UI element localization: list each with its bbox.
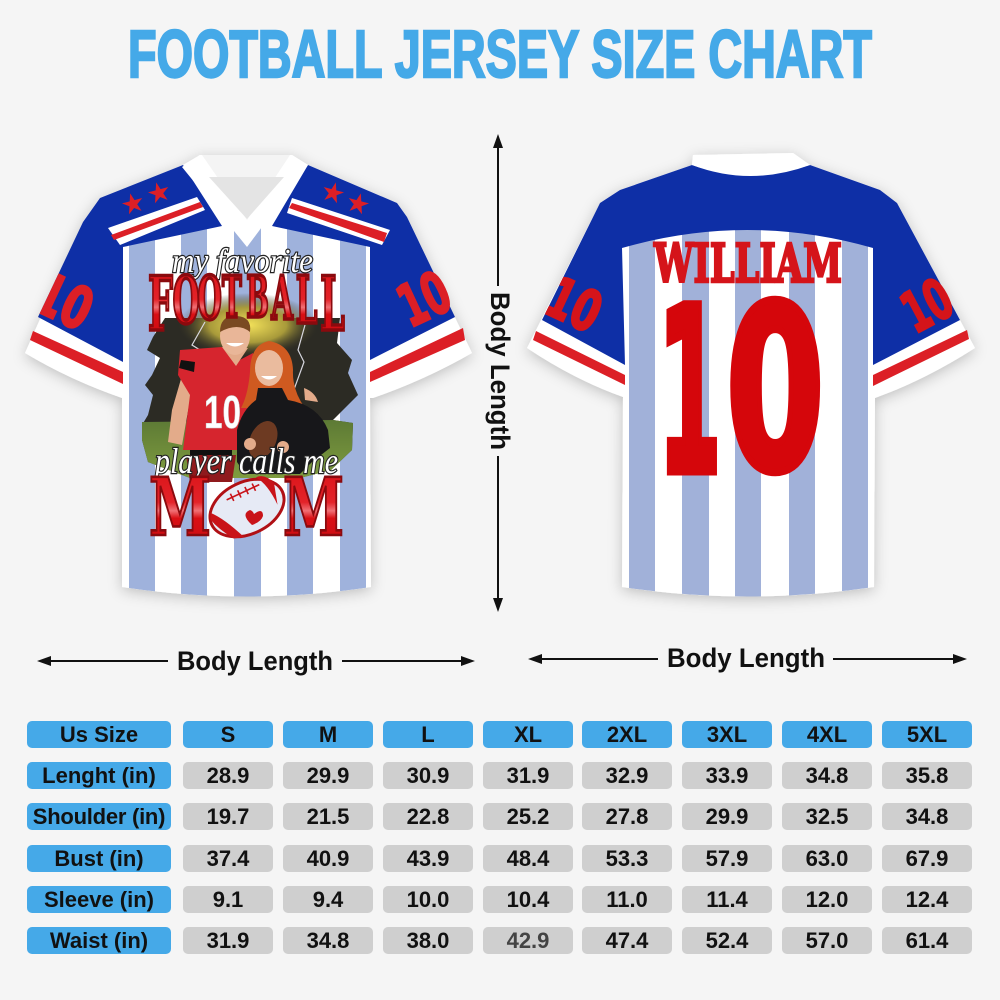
- row: sleeve: 9.1: [213, 887, 243, 912]
- arrow: back width: [528, 643, 967, 673]
- row: bust: 57.9: [706, 846, 748, 871]
- back collar: [692, 153, 810, 176]
- row: bust: 48.4: [507, 846, 549, 871]
- arrow: back width: Body Length: [667, 643, 825, 673]
- row: waist: 38.0: [407, 928, 449, 953]
- header row: us sizes: M: [319, 722, 337, 747]
- photo: woman in black sweater: [237, 341, 330, 474]
- sleeve stripes: [533, 330, 969, 386]
- row: length: [27, 762, 972, 789]
- row: shoulder: 22.8: [407, 804, 449, 829]
- header row: us sizes: Us Size: [60, 722, 138, 747]
- jersey silhouette: [25, 155, 472, 596]
- photo: man in red jersey: [168, 316, 254, 482]
- artwork text: FOOTBALL: T: [222, 263, 242, 331]
- row: waist: 31.9: [207, 928, 249, 953]
- artwork text: FOOTBALL: B: [246, 263, 269, 331]
- row: length: 28.9: [207, 763, 249, 788]
- row: bust: Bust (in): [54, 846, 144, 871]
- artwork text: MOM: M: [149, 460, 211, 554]
- row: shoulder: 29.9: [706, 804, 748, 829]
- number: 10: 1: [658, 260, 721, 525]
- photo: stadium background: [142, 293, 358, 478]
- left sleeve number: 10: [535, 265, 611, 347]
- body stripes: [629, 225, 868, 600]
- collar: [182, 155, 308, 247]
- row: waist: 57.0: [806, 928, 848, 953]
- row: length: 35.8: [906, 763, 948, 788]
- row: waist: 47.4: [606, 928, 648, 953]
- row: length: 31.9: [507, 763, 549, 788]
- row: sleeve: 11.0: [606, 887, 648, 912]
- header row: us sizes: 2XL: [607, 722, 647, 747]
- header row: us sizes: L: [421, 722, 435, 747]
- left sleeve and yoke: 10: [24, 259, 104, 344]
- row: sleeve: 10.4: [507, 887, 549, 912]
- photo: man in red jersey: 10: [204, 386, 241, 438]
- arrow: front width: [37, 646, 475, 676]
- row: bust: 63.0: [806, 846, 848, 871]
- right sleeve number: 10: [891, 266, 964, 346]
- row: length: 30.9: [407, 763, 449, 788]
- artwork text: player calls me: player calls me: [153, 441, 338, 481]
- number: 10: [658, 257, 824, 525]
- row: length: 34.8: [806, 763, 848, 788]
- artwork text: FOOTBALL: F: [148, 260, 173, 348]
- right sleeve and yoke: [272, 165, 465, 382]
- row: shoulder: Shoulder (in): [33, 804, 165, 829]
- row: length: 29.9: [307, 763, 349, 788]
- row: shoulder: [27, 803, 972, 830]
- row: shoulder: 34.8: [906, 804, 948, 829]
- header row: us sizes: 5XL: [907, 722, 947, 747]
- row: length: 32.9: [606, 763, 648, 788]
- row: waist: 34.8: [307, 928, 349, 953]
- row: waist: 52.4: [706, 928, 748, 953]
- arrow: vertical body length: [485, 134, 515, 612]
- arrow: vertical body length: Body Length: [485, 292, 515, 450]
- row: bust: 37.4: [207, 846, 249, 871]
- artwork text: FOOTBALL: O: [172, 263, 200, 340]
- icon: football with heart: [201, 468, 293, 548]
- row: bust: 43.9: [407, 846, 449, 871]
- row: sleeve: 9.4: [313, 887, 343, 912]
- row: shoulder: 19.7: [207, 804, 249, 829]
- row: bust: [27, 845, 972, 872]
- row: waist: 61.4: [906, 928, 948, 953]
- row: bust: 53.3: [606, 846, 648, 871]
- artwork text: FOOTBALL: L: [296, 263, 317, 340]
- row: length: Lenght (in): [42, 763, 156, 788]
- row: sleeve: 12.4: [906, 887, 948, 912]
- yoke and sleeves: [542, 165, 960, 365]
- header row: us sizes: XL: [514, 722, 542, 747]
- row: waist: Waist (in): [50, 928, 148, 953]
- row: sleeve: [27, 886, 972, 913]
- row: sleeve: 10.0: [407, 887, 449, 912]
- header row: us sizes: 4XL: [807, 722, 847, 747]
- left sleeve and yoke: [24, 165, 222, 384]
- row: shoulder: 25.2: [507, 804, 549, 829]
- row: sleeve: 12.0: [806, 887, 848, 912]
- row: sleeve: Sleeve (in): [44, 887, 154, 912]
- right sleeve and yoke: 10: [387, 258, 461, 341]
- row: shoulder: 32.5: [806, 804, 848, 829]
- row: waist: [27, 927, 972, 954]
- arrow: front width: Body Length: [177, 646, 333, 676]
- header row: us sizes: 3XL: [707, 722, 747, 747]
- artwork text: my favorite: my favorite: [172, 243, 313, 280]
- number: 10: 0: [726, 257, 824, 523]
- row: shoulder: 21.5: [307, 804, 349, 829]
- artwork text: FOOTBALL: A: [271, 264, 293, 334]
- front jersey: [24, 155, 472, 600]
- header row: us sizes: S: [221, 722, 235, 747]
- back jersey: [527, 153, 975, 600]
- name: WILLIAM: WILLIAM: [653, 233, 842, 295]
- row: bust: 40.9: [307, 846, 349, 871]
- artwork text: FOOTBALL: L: [320, 260, 345, 348]
- body stripes: [129, 220, 366, 600]
- artwork text: MOM: [149, 460, 344, 554]
- row: waist: 42.9: [507, 928, 549, 953]
- artwork text: MOM: M: [283, 460, 344, 554]
- artwork text: FOOTBALL: O: [197, 264, 222, 334]
- row: sleeve: 11.4: [706, 887, 748, 912]
- row: shoulder: 27.8: [606, 804, 648, 829]
- row: bust: 67.9: [906, 846, 948, 871]
- icons: shoulder stars: [120, 180, 371, 215]
- row: length: 33.9: [706, 763, 748, 788]
- jersey silhouette: [527, 153, 975, 596]
- header row: us sizes: [27, 721, 972, 748]
